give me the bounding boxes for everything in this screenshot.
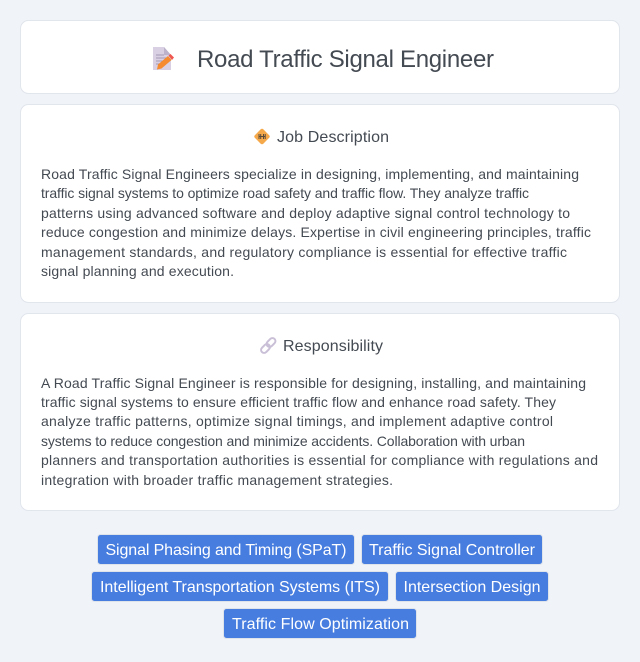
tag: controller: Traffic Signal Controller bbox=[369, 542, 536, 559]
job description text: signal planning and execution. bbox=[41, 263, 234, 279]
tag: ITS bbox=[92, 572, 388, 602]
responsibility text: systems to reduce congestion and minimize accidents. Collaboration with urban bbox=[41, 433, 525, 449]
responsibility text: planners and transportation authorities is essential for compliance with regulations and bbox=[41, 452, 598, 468]
tag: SPaT: Signal Phasing and Timing (SPaT) bbox=[106, 542, 346, 559]
job description text bbox=[41, 166, 591, 279]
job description text: reduce congestion and minimize delays. Expertise in civil engineering principles, traffic bbox=[41, 224, 591, 240]
panel: responsibility bbox=[20, 314, 620, 510]
job description text: Road Traffic Signal Engineers specialize in designing, implementing, and maintaining bbox=[41, 166, 579, 182]
heading: responsibility: Responsibility bbox=[283, 338, 383, 355]
responsibility text: traffic signal systems to ensure efficient traffic flow and enhance road safety. They bbox=[41, 394, 556, 410]
icon: chain link bbox=[260, 337, 277, 354]
tag: ITS: Intelligent Transportation Systems (ITS) bbox=[100, 579, 380, 596]
tag: flow optimization bbox=[224, 608, 416, 638]
job description text: management standards, and regulatory compliance is essential for effective traffic bbox=[41, 244, 567, 260]
panel: job description bbox=[20, 104, 620, 302]
panel: title bbox=[20, 20, 620, 94]
tags bbox=[92, 534, 548, 638]
responsibility text: A Road Traffic Signal Engineer is responsible for designing, installing, and maintaining bbox=[41, 375, 586, 391]
tag: intersection design: Intersection Design bbox=[404, 579, 540, 596]
tag: flow optimization: Traffic Flow Optimization bbox=[232, 616, 409, 633]
heading: job description: Job Description bbox=[277, 129, 389, 146]
responsibility text: integration with broader traffic management strategies. bbox=[41, 472, 393, 488]
responsibility text bbox=[41, 375, 598, 488]
job description text: patterns using advanced software and deploy adaptive signal control technology to bbox=[41, 205, 570, 221]
tag: intersection design bbox=[396, 572, 548, 602]
icon: document with pencil bbox=[153, 47, 174, 70]
tag: SPaT bbox=[98, 534, 354, 564]
title text: Road Traffic Signal Engineer bbox=[197, 46, 494, 73]
icon: road sign diamond bbox=[254, 128, 270, 145]
job description text: traffic signal systems to optimize road safety and traffic flow. They analyze traffic bbox=[41, 185, 529, 201]
tag: controller bbox=[362, 534, 542, 564]
responsibility text: analyze traffic patterns, optimize signal timings, and implement adaptive control bbox=[41, 413, 553, 429]
